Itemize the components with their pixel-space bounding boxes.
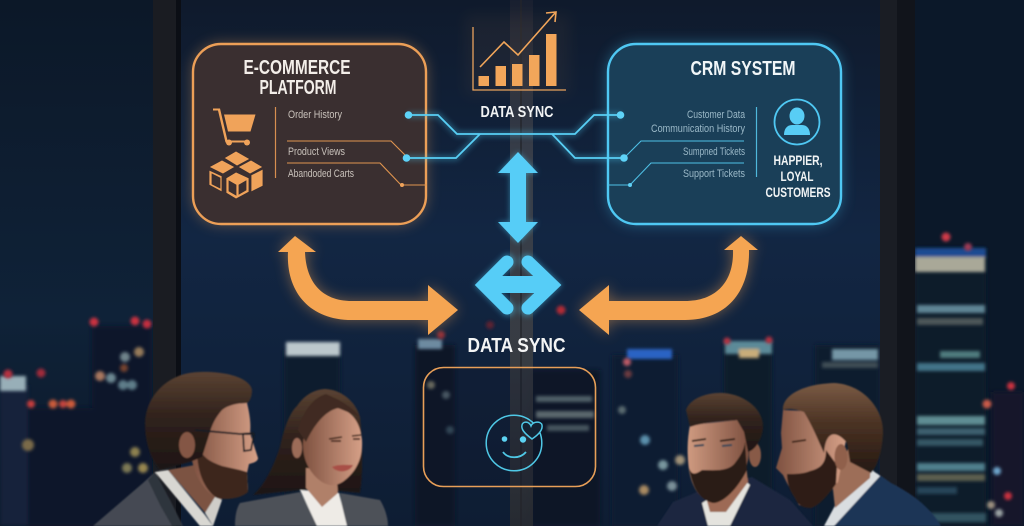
panel: crm system [607,43,842,225]
beard [689,442,747,503]
panel: happy customer box [424,368,596,486]
heading: data sync top: DATA SYNC [480,104,554,121]
person: man with glasses [93,372,258,526]
person: bearded man facing viewer [657,393,813,526]
person: man in profile [776,383,941,526]
list: crm data: Communication History [651,123,745,135]
suit [657,477,813,526]
panel title [244,57,350,99]
bar chart icon: growth [465,12,570,95]
suit [235,492,388,526]
face [776,410,846,508]
leader lines [287,141,427,185]
arrow: orange curved right [579,236,758,335]
arrow: horizontal double arrow [484,261,552,309]
divider [274,107,276,178]
callout: happier, loyal customers: LOYAL [780,168,814,184]
suit [93,472,183,526]
icon: stacked boxes [209,151,263,199]
beard [787,450,837,508]
list: e-commerce data: Order History [288,109,342,121]
list: crm data: Sumpned Tickets [683,146,745,158]
person: woman [235,389,388,526]
neck [168,465,225,516]
connectors: glowing data lines [403,111,628,162]
arrow: orange curved left [278,236,458,335]
panel title: CRM SYSTEM [690,58,796,80]
icon: customer avatar [774,100,820,144]
list: e-commerce data [288,109,354,180]
callout: happier, loyal customers [766,152,830,200]
heading: data sync bottom: DATA SYNC [468,335,566,357]
callout: happier, loyal customers: CUSTOMERS [766,184,830,200]
list: crm data: Support Tickets [683,168,745,180]
neck and shirt [300,490,347,526]
panel title: PLATFORM [260,77,336,99]
skyline: blurred city buildings [0,232,1024,526]
shirt [824,470,880,526]
hair [686,393,763,452]
icon: smiley with heart [486,415,542,471]
list: crm data [651,109,746,180]
window frames [153,0,915,526]
beard [197,445,248,499]
callout: happier, loyal customers: HAPPIER, [774,152,822,168]
shirt [702,478,750,526]
hair [783,383,883,473]
panel title: E-COMMERCE [244,57,350,79]
face [688,420,749,502]
shirt collar [155,470,213,526]
suit [824,473,941,526]
list: e-commerce data: Product Views [288,146,345,158]
icon: shopping cart [213,108,256,146]
divider [756,107,758,177]
list: crm data: Customer Data [687,109,746,121]
list: e-commerce data: Abandoded Carts [288,168,354,180]
face [303,408,362,485]
face [192,403,258,498]
leader lines [608,141,744,185]
panel: e-commerce platform [192,43,427,225]
arrow: vertical double arrow [498,152,538,243]
hair [145,372,252,470]
